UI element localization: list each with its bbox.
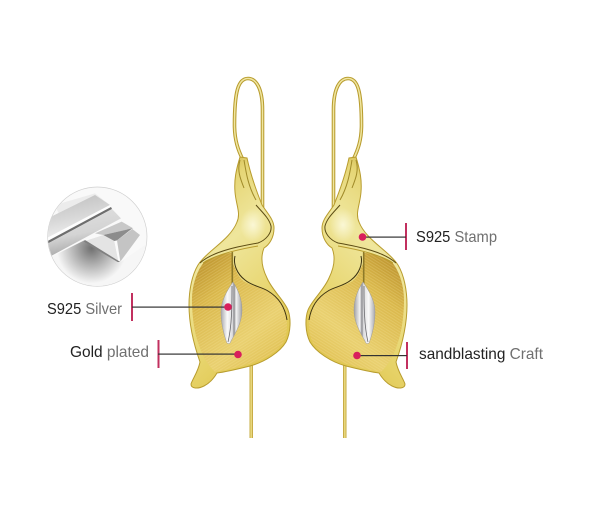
callout: S925 Stamp: S925 Stamp — [416, 229, 497, 246]
callout: sandblasting Craft — [353, 342, 544, 369]
callout: S925 Silver: S925 Silver — [47, 301, 123, 318]
callout: Gold plated — [70, 340, 242, 368]
infographic canvas — [47, 76, 543, 438]
callout: S925 Stamp — [359, 223, 497, 250]
callout: Gold plated: Gold plated — [70, 344, 149, 361]
callout: sandblasting Craft: sandblasting Craft — [419, 346, 544, 363]
callout: S925 Silver — [47, 293, 232, 321]
left earring — [189, 78, 290, 438]
ground shadow — [58, 240, 145, 286]
icon: silver ingots circle — [48, 187, 147, 288]
right earring — [306, 78, 407, 438]
lower ingot — [83, 222, 140, 262]
upper ingot — [48, 193, 121, 256]
